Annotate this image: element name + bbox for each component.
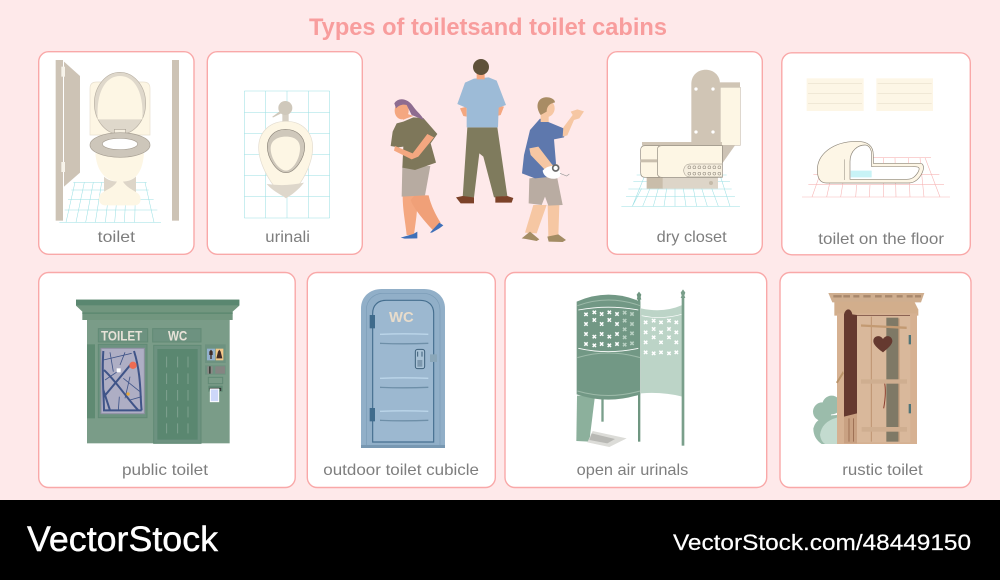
icon: dry closet side view xyxy=(621,70,740,206)
label: urinali xyxy=(265,229,310,246)
icon: open air urinal screens xyxy=(576,289,685,447)
footer bar xyxy=(0,500,1000,580)
panel: urinal xyxy=(207,52,362,254)
icon: public toilet building xyxy=(76,300,239,443)
icon: toilet in stall xyxy=(56,60,179,222)
label: toilet xyxy=(98,229,136,246)
label: toilet on the floor xyxy=(818,231,945,248)
footer image id: VectorStock.com/48449150 xyxy=(673,530,971,555)
panel: toilet on the floor xyxy=(782,53,970,255)
panel: open air urinals xyxy=(505,272,767,488)
panel: rustic toilet xyxy=(780,272,971,488)
label: outdoor toilet cubicle xyxy=(323,462,479,479)
figure: man from behind xyxy=(456,59,513,203)
label: dry closet xyxy=(657,229,727,246)
label: open air urinals xyxy=(577,462,688,479)
icon: public toilet building: WC xyxy=(168,329,187,344)
panel: public toilet xyxy=(39,272,295,488)
icon: urinal on tiled wall xyxy=(244,91,330,218)
figure: man with paper roll xyxy=(522,97,584,242)
footer brand: VectorStock xyxy=(27,520,219,559)
icon: wooden outhouse xyxy=(813,293,924,444)
panel: dry closet xyxy=(607,52,762,254)
icon: floor toilet with wall tiles xyxy=(802,78,950,197)
icon: public toilet building: TOILET xyxy=(101,329,143,344)
title: Types of toiletsand toilet cabins xyxy=(309,14,667,41)
panel: outdoor toilet cubicle xyxy=(307,272,495,488)
icon: portable toilet xyxy=(361,289,445,448)
figure: woman xyxy=(391,99,443,239)
label: rustic toilet xyxy=(842,462,923,479)
label: public toilet xyxy=(122,462,209,479)
illustration: three people xyxy=(391,59,584,242)
icon: portable toilet: WC xyxy=(389,310,414,326)
panel: toilet xyxy=(39,52,194,254)
